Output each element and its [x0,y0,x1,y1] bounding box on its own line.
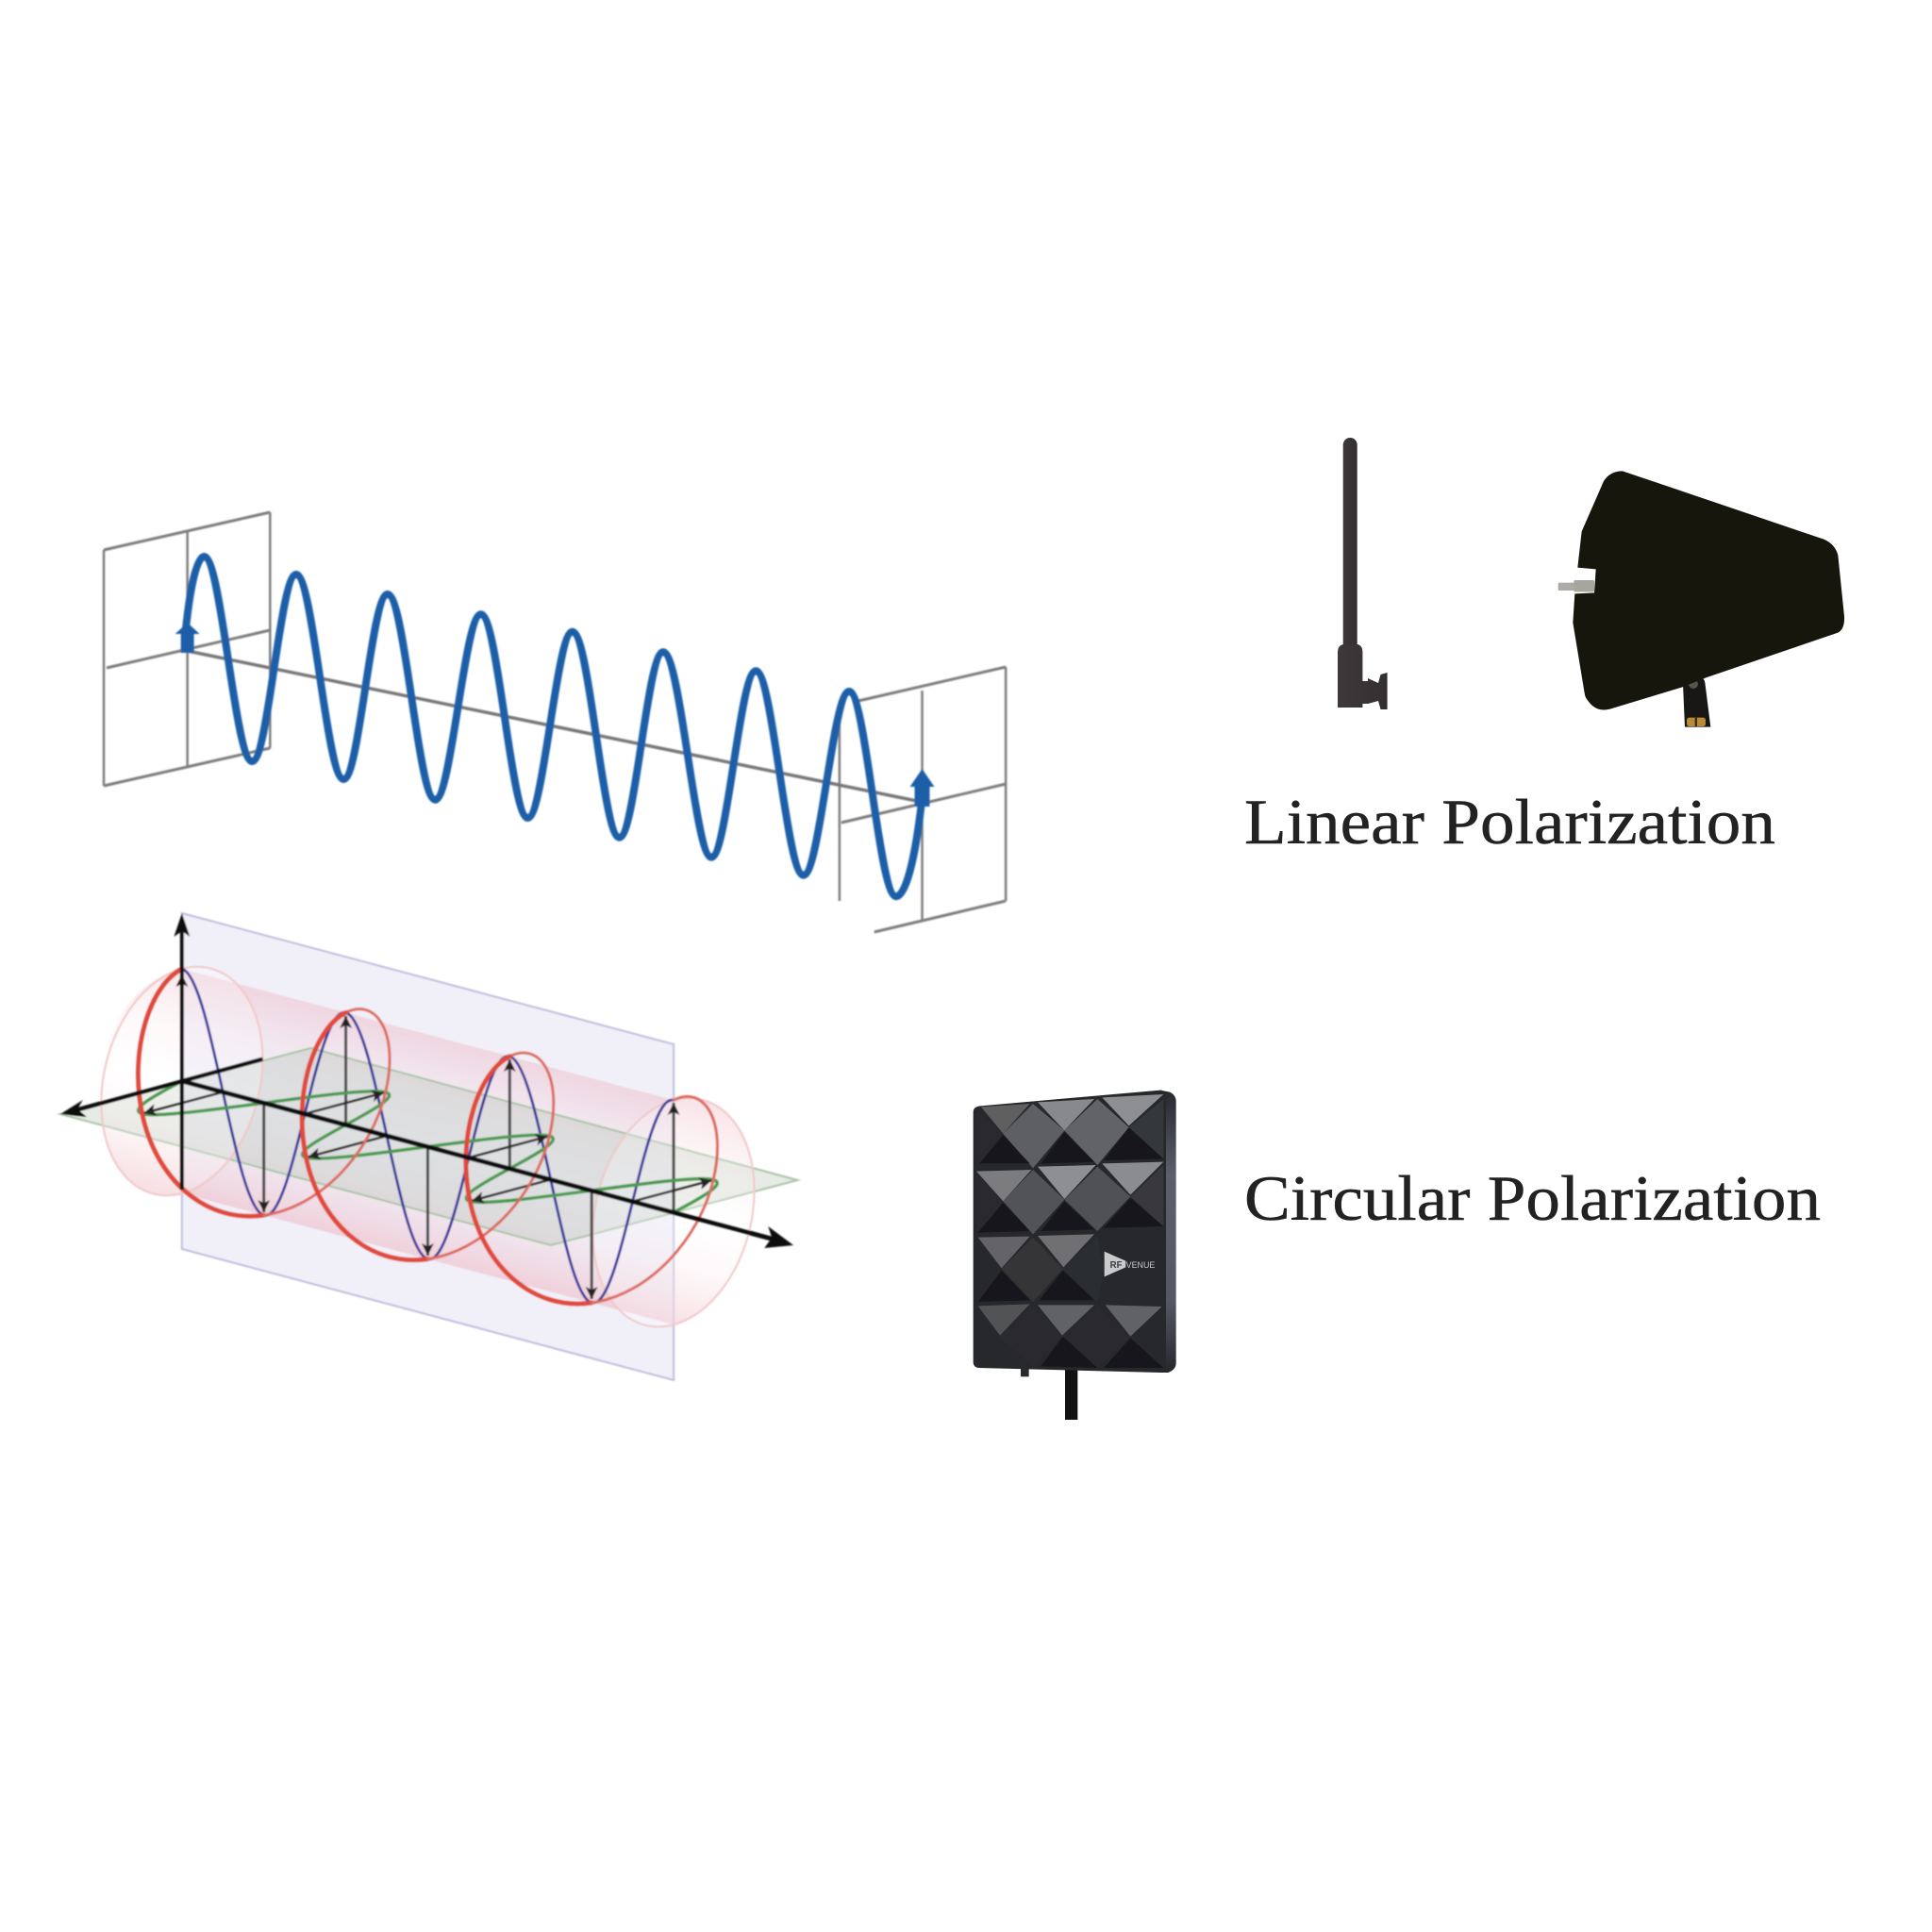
green horizontal wave [139,1081,717,1212]
RF Venue logo: RF [1110,1260,1123,1271]
right reference frame [840,667,1006,932]
right cap outline [592,1078,755,1346]
label: circular polarization: Circular Polarization [1244,1162,1821,1234]
icon: RF Venue circular antenna panel [974,1091,1176,1420]
side facets [976,1099,1163,1368]
panel face [974,1091,1166,1373]
vertical plane [182,913,674,1380]
diagram: circular polarization helix [60,913,797,1380]
blue vertical wave [182,969,674,1303]
label: linear polarization: Linear Polarization [1244,786,1775,858]
icon: paddle antenna [1558,471,1844,727]
right blue arrow [910,769,934,807]
red helix [138,969,717,1304]
silver connector [1558,580,1594,591]
diagram: linear polarization wave [104,512,1006,932]
bottom tab [1683,675,1710,727]
left reference frame [104,512,270,786]
vertical field arrows [182,974,674,1299]
paddle body [1573,471,1844,709]
RF Venue logo [1105,1252,1155,1276]
blue sine wave [186,557,923,896]
RF Venue logo: VENUE [1126,1260,1155,1270]
left cap outline [101,947,262,1215]
pink tube [101,969,755,1324]
lit triangles [976,1094,1163,1337]
vertical axis arrow [174,913,190,1190]
horizontal green plane [60,1048,797,1245]
cross axis arrow [60,1059,263,1117]
connector nub [1021,1368,1029,1376]
horizontal field arrows [144,1092,711,1202]
side edge [1160,1091,1176,1373]
pyramid facets [976,1094,1163,1368]
icon: whip antenna [1338,438,1388,709]
left blue arrow [175,623,200,653]
dark triangles [978,1127,1163,1368]
cable [1065,1368,1077,1420]
propagation axis [188,651,922,802]
main propagation axis arrow [182,1081,793,1248]
